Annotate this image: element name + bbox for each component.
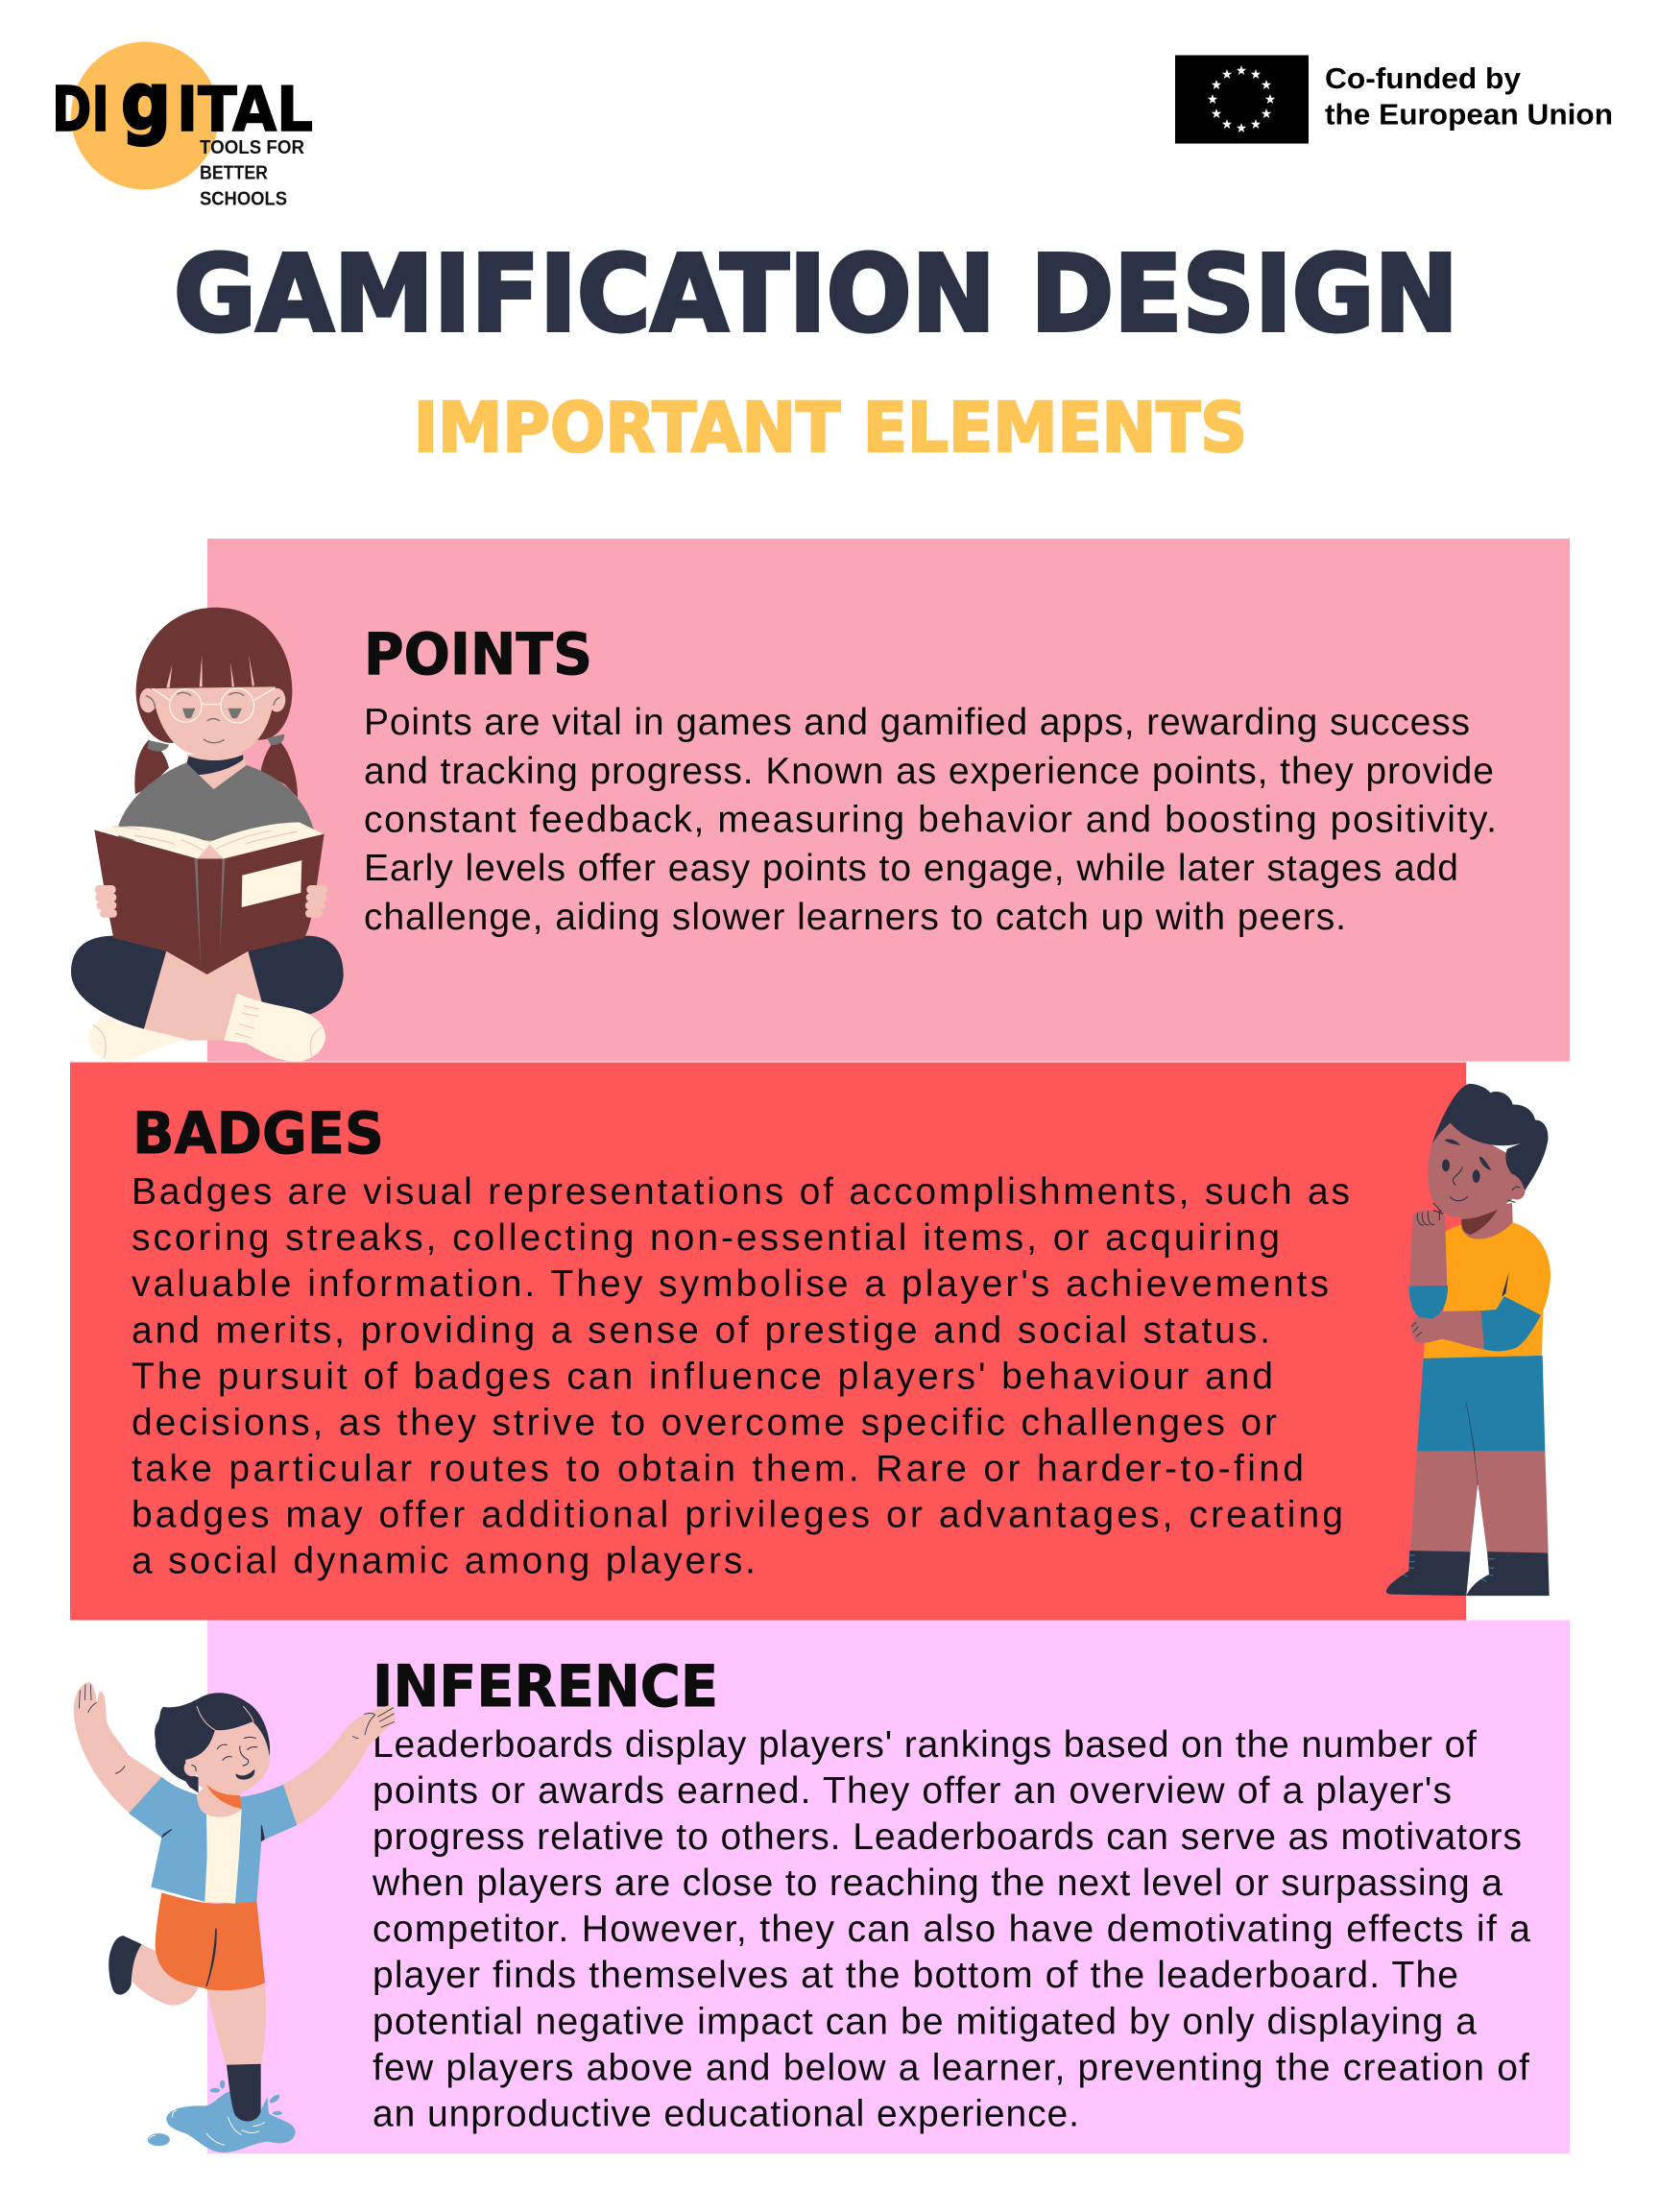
text block: badges: valuable information. They symbolise a player's achievements [132, 1263, 1329, 1305]
text block: badges: Badges are visual representations of accomplishments, such as [132, 1171, 1350, 1213]
text block: inference [372, 1724, 1530, 2135]
heading: badges: BADGES [132, 1100, 384, 1167]
logo: Digital Tools for Better Schools: g [121, 57, 171, 148]
logo: Digital Tools for Better Schools: BETTER [200, 163, 268, 184]
text block: points [364, 702, 1497, 938]
logo: Digital Tools for Better Schools: TOOLS FOR [200, 137, 305, 158]
EU co-funding badge: Co-funded by [1325, 61, 1522, 95]
text block: inference: an unproductive educational experience. [373, 2093, 1079, 2135]
text block: inference: Leaderboards display players' rankings based on the number of [373, 1724, 1477, 1766]
text block: inference: when players are close to reaching the next level or surpassing a [372, 1863, 1503, 1904]
text block: badges: and merits, providing a sense of prestige and social status. [132, 1310, 1270, 1352]
text block: points: challenge, aiding slower learners to catch up with peers. [364, 897, 1346, 938]
panel: badges [70, 1062, 1466, 1621]
panel: points [207, 539, 1570, 1062]
text block: inference: potential negative impact can be mitigated by only displaying a [373, 2001, 1477, 2043]
text block: badges: a social dynamic among players. [132, 1540, 756, 1582]
text block: badges: badges may offer additional privileges or advantages, creating [132, 1494, 1343, 1536]
illustration: thinking boy [1386, 1084, 1551, 1596]
heading: points: POINTS [364, 621, 592, 688]
text block: badges: decisions, as they strive to overcome specific challenges or [132, 1402, 1277, 1444]
heading: inference: INFERENCE [373, 1653, 718, 1720]
text block: inference: player finds themselves at the bottom of the leaderboard. The [373, 1955, 1458, 1996]
logo: Digital Tools for Better Schools: SCHOOLS [200, 188, 287, 209]
text block: points: constant feedback, measuring behavior and boosting positivity. [364, 799, 1497, 841]
text block: badges: take particular routes to obtain them. Rare or harder-to-find [132, 1448, 1304, 1490]
EU co-funding badge [1175, 56, 1613, 144]
text block: inference: competitor. However, they can also have demotivating effects if a [373, 1909, 1530, 1950]
text block: points: and tracking progress. Known as experience points, they provide [364, 751, 1494, 792]
logo: Digital Tools for Better Schools [52, 42, 313, 209]
text block: points: Points are vital in games and gamified apps, rewarding success [364, 702, 1470, 743]
illustration: jumping child in puddle [74, 1682, 396, 2152]
text block: inference: progress relative to others. Leaderboards can serve as motivators [373, 1816, 1522, 1858]
text block: badges: scoring streaks, collecting non-essential items, or acquiring [132, 1217, 1280, 1259]
illustration: girl reading a book [71, 608, 344, 1062]
text block: inference: few players above and below a learner, preventing the creation of [373, 2047, 1529, 2089]
logo: Digital Tools for Better Schools: DI [52, 75, 109, 146]
text block: badges: The pursuit of badges can influence players' behaviour and [132, 1356, 1273, 1398]
text block: badges [132, 1171, 1350, 1582]
logo: Digital Tools for Better Schools: ITAL [177, 75, 313, 146]
text block: inference: points or awards earned. They offer an overview of a player's [373, 1770, 1452, 1812]
subtitle: IMPORTANT ELEMENTS [414, 388, 1247, 468]
title: GAMIFICATION DESIGN [174, 232, 1458, 355]
text block: points: Early levels offer easy points to engage, while later stages add [364, 848, 1458, 889]
panel: inference [207, 1621, 1570, 2153]
EU co-funding badge: the European Union [1325, 98, 1613, 131]
